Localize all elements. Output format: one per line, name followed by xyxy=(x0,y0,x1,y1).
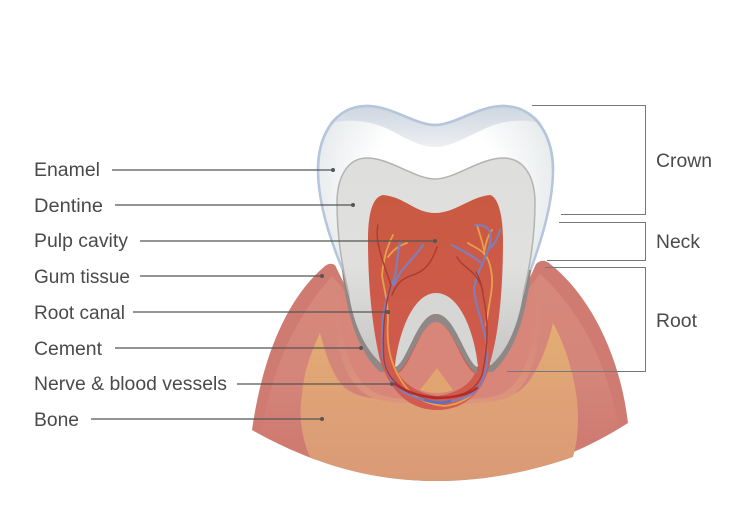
inner arch cement xyxy=(396,314,477,373)
bracket: root xyxy=(507,268,646,372)
label: Root: Root xyxy=(656,311,698,332)
brackets xyxy=(507,106,646,372)
bracket: crown xyxy=(532,106,646,214)
label: Crown: Crown xyxy=(656,151,712,172)
label: Nerve & blood vessels: Nerve & blood vessels xyxy=(34,374,227,395)
blue vessels xyxy=(382,225,500,402)
label: Gum tissue: Gum tissue xyxy=(34,267,130,288)
dentine xyxy=(337,158,535,366)
tooth xyxy=(318,106,553,410)
label: Enamel: Enamel xyxy=(34,160,100,181)
dark red vessels xyxy=(377,225,487,397)
enamel top band xyxy=(329,106,542,147)
orange nerves xyxy=(382,225,492,406)
gum tissue xyxy=(252,261,628,481)
leader lines xyxy=(91,170,435,419)
bone xyxy=(301,323,578,481)
label: Neck: Neck xyxy=(656,232,700,253)
pulp inner arch xyxy=(395,293,478,368)
label: Bone: Bone xyxy=(34,410,79,431)
label: Dentine: Dentine xyxy=(34,196,103,217)
gum halo around root xyxy=(335,290,540,404)
pulp cavity xyxy=(368,195,503,410)
bone peak under arch xyxy=(420,368,453,393)
labels xyxy=(34,151,712,431)
gum under arch xyxy=(398,322,475,396)
leader dots xyxy=(320,168,437,421)
label: Pulp cavity: Pulp cavity xyxy=(34,231,129,252)
bracket: neck xyxy=(547,222,646,260)
enamel xyxy=(318,106,553,277)
nerve & blood vessels xyxy=(377,225,500,406)
label: Root canal: Root canal xyxy=(34,303,125,324)
cement xyxy=(342,270,531,372)
label: Cement: Cement xyxy=(34,339,103,360)
